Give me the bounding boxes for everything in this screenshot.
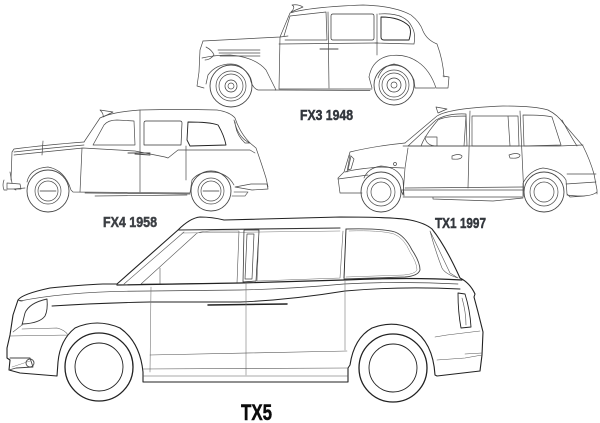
- car drawing: FX4 1958: [3, 110, 268, 212]
- body outline: [7, 217, 483, 382]
- beltline: [117, 278, 462, 285]
- rear wheel: [359, 334, 427, 402]
- front wheel: [65, 333, 133, 401]
- door handle strip: [208, 304, 287, 305]
- label: FX3 1948: FX3 1948: [300, 107, 353, 124]
- tail light: [458, 293, 471, 328]
- car drawing: FX3 1948: [197, 5, 449, 107]
- window glass: [141, 231, 239, 284]
- car drawing: TX1 1997: [338, 106, 597, 212]
- door seams: [150, 280, 345, 375]
- car drawing: TX5: [7, 217, 483, 402]
- label: FX4 1958: FX4 1958: [103, 214, 157, 231]
- headlight and front details: [22, 299, 47, 325]
- label: TX1 1997: TX1 1997: [435, 215, 486, 232]
